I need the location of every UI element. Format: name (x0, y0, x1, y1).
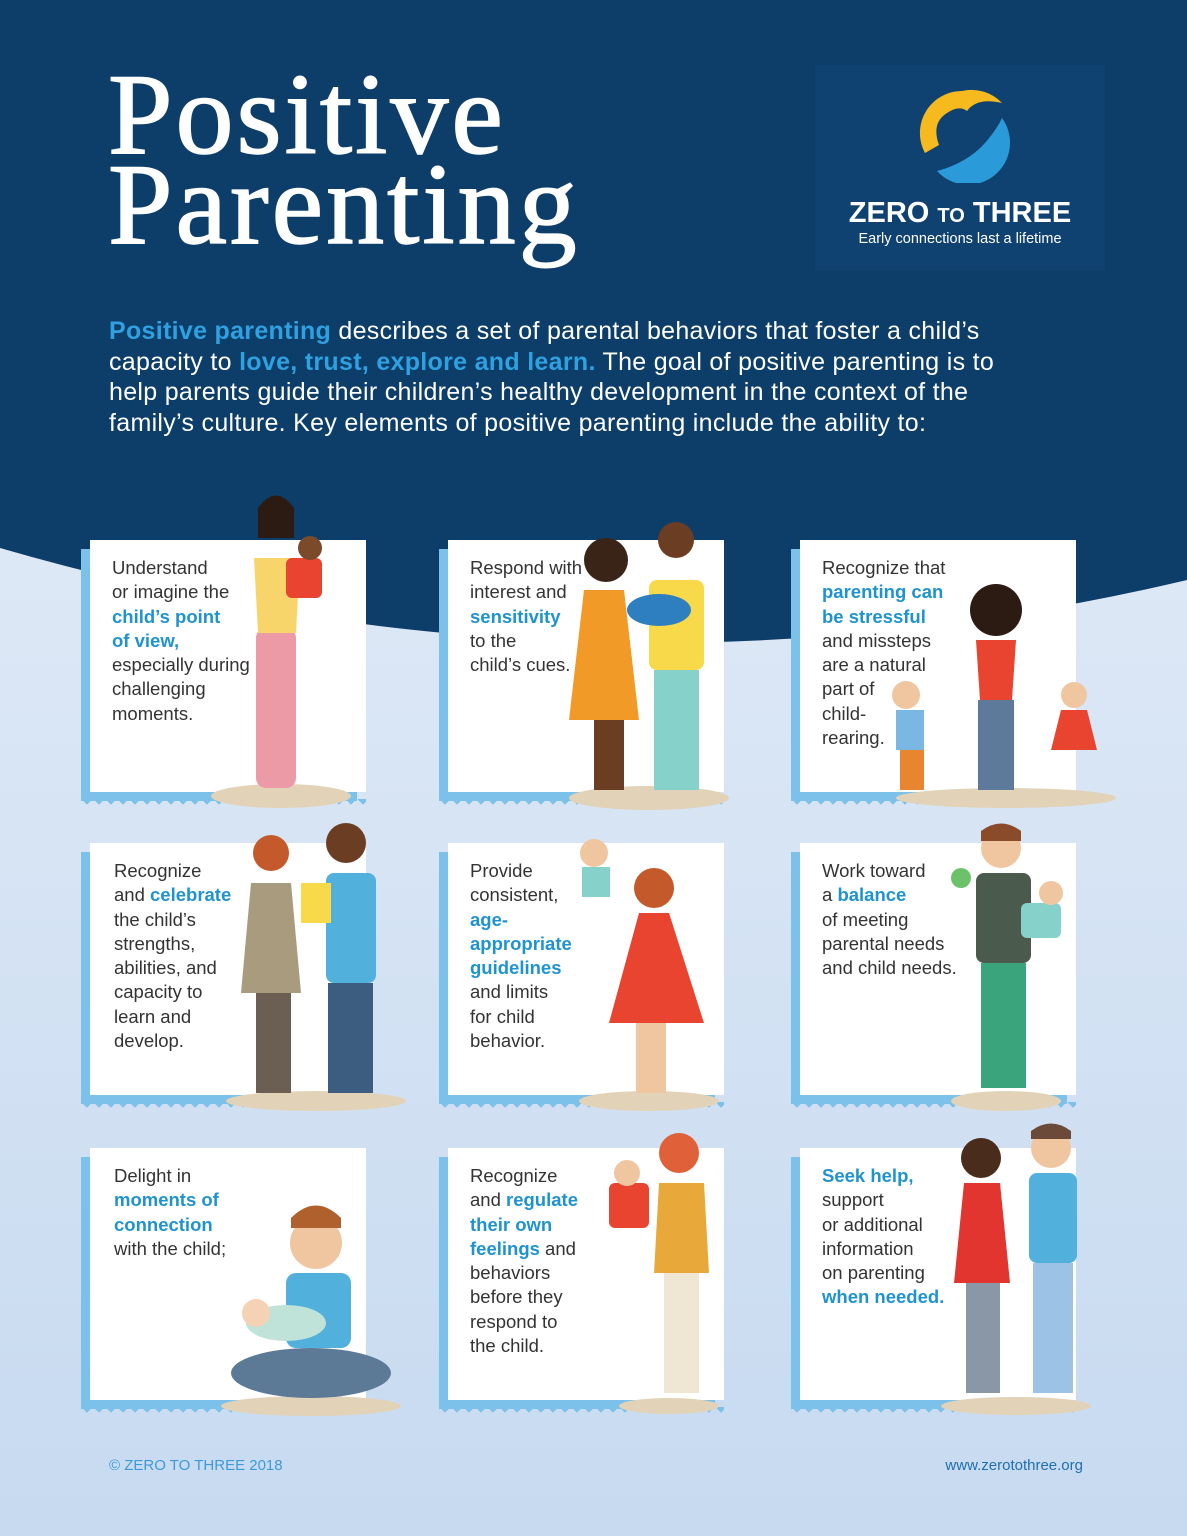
card 3 (800, 540, 1076, 792)
text 3: child- (822, 703, 866, 724)
text 9: support (822, 1189, 884, 1210)
text 8: behaviors (470, 1262, 550, 1283)
illustration 9 (941, 1124, 1091, 1415)
card 1 (90, 540, 366, 792)
illustration 4 (226, 823, 406, 1111)
text 6: and child needs. (822, 957, 957, 978)
logo: ZERO TO THREE (815, 65, 1105, 270)
text 3: Recognize that (822, 557, 945, 578)
text 1: child’s point (112, 606, 220, 627)
text 2: sensitivity (470, 606, 560, 627)
text 4 (114, 860, 231, 1051)
footer url: www.zerotothree.org (945, 1457, 1083, 1474)
card 8 (448, 1148, 724, 1400)
text 5 (470, 860, 572, 1051)
text 1: or imagine the (112, 581, 229, 602)
icon: logo circle (920, 90, 1010, 183)
card 4 (90, 843, 366, 1095)
illustration 5 (579, 839, 719, 1111)
text 4: abilities, and (114, 957, 217, 978)
text 3: parenting can (822, 581, 943, 602)
text 7: moments of (114, 1189, 219, 1210)
text 1: challenging (112, 678, 206, 699)
text 9: on parenting (822, 1262, 925, 1283)
text 1: especially during (112, 654, 250, 675)
card 5 (448, 843, 724, 1095)
text 6 (822, 860, 957, 978)
intro paragraph (109, 317, 994, 436)
text 8: feelings and (470, 1238, 576, 1259)
card 2 (448, 540, 724, 792)
text 7: Delight in (114, 1165, 191, 1186)
intro paragraph: family’s culture. Key elements of positive parenting include the ability to: (109, 408, 926, 436)
text 6: a balance (822, 884, 906, 905)
text 8: Recognize (470, 1165, 557, 1186)
text 3 (822, 557, 946, 748)
text 4: the child’s (114, 909, 196, 930)
text 5: Provide (470, 860, 533, 881)
intro paragraph: help parents guide their children’s healthy development in the context of the (109, 378, 968, 406)
text 8: their own (470, 1214, 552, 1235)
text 1: moments. (112, 703, 193, 724)
illustration 2 (569, 522, 729, 810)
intro paragraph: Positive parenting describes a set of parental behaviors that foster a child’s (109, 317, 980, 345)
footer copyright: © ZERO TO THREE 2018 (109, 1457, 283, 1474)
text 7 (114, 1165, 226, 1259)
text 3: are a natural (822, 654, 926, 675)
text 8: and regulate (470, 1189, 578, 1210)
text 8: before they (470, 1286, 563, 1307)
text 8: respond to (470, 1311, 557, 1332)
text 5: consistent, (470, 884, 558, 905)
text 9 (822, 1165, 944, 1307)
title (108, 51, 580, 269)
text 3: be stressful (822, 606, 926, 627)
text 2: Respond with (470, 557, 582, 578)
text 5: for child (470, 1006, 535, 1027)
title: Parenting (108, 141, 580, 269)
text 1: Understand (112, 557, 208, 578)
card 7 (90, 1148, 366, 1400)
text 4: develop. (114, 1030, 184, 1051)
text 7: with the child; (114, 1238, 226, 1259)
text 8: the child. (470, 1335, 544, 1356)
text 4: and celebrate (114, 884, 231, 905)
text 4: capacity to (114, 981, 202, 1002)
text 9: Seek help, (822, 1165, 914, 1186)
text 9: or additional (822, 1214, 923, 1235)
text 1 (112, 557, 250, 724)
text 1: of view, (112, 630, 179, 651)
text 5: age- (470, 909, 508, 930)
text 6: of meeting (822, 909, 908, 930)
text 5: guidelines (470, 957, 562, 978)
text 2: to the (470, 630, 516, 651)
logo text: ZERO TO THREE (849, 197, 1071, 229)
text 8 (470, 1165, 578, 1356)
illustration 8 (609, 1133, 719, 1414)
text 6: parental needs (822, 933, 944, 954)
illustration 6 (951, 824, 1063, 1111)
text 2: child’s cues. (470, 654, 570, 675)
illustration 3 (892, 584, 1116, 808)
logo: ZERO TO THREE: Early connections last a lifetime (858, 231, 1062, 247)
illustration 7 (221, 1206, 401, 1416)
intro paragraph: capacity to love, trust, explore and learn. The goal of positive parenting is to (109, 348, 994, 376)
text 9: when needed. (822, 1286, 944, 1307)
text 5: behavior. (470, 1030, 545, 1051)
text 3: part of (822, 678, 874, 699)
text 2: interest and (470, 581, 567, 602)
text 5: appropriate (470, 933, 572, 954)
text 6: Work toward (822, 860, 926, 881)
text 4: strengths, (114, 933, 195, 954)
title: Positive (108, 51, 506, 179)
illustration 1 (211, 496, 351, 808)
text 2 (470, 557, 582, 675)
text 7: connection (114, 1214, 213, 1235)
text 9: information (822, 1238, 914, 1259)
text 3: and missteps (822, 630, 931, 651)
card 9 (800, 1148, 1076, 1400)
card 6 (800, 843, 1076, 1095)
text 4: Recognize (114, 860, 201, 881)
text 5: and limits (470, 981, 548, 1002)
text 4: learn and (114, 1006, 191, 1027)
text 3: rearing. (822, 727, 885, 748)
navy header background (0, 0, 1187, 642)
